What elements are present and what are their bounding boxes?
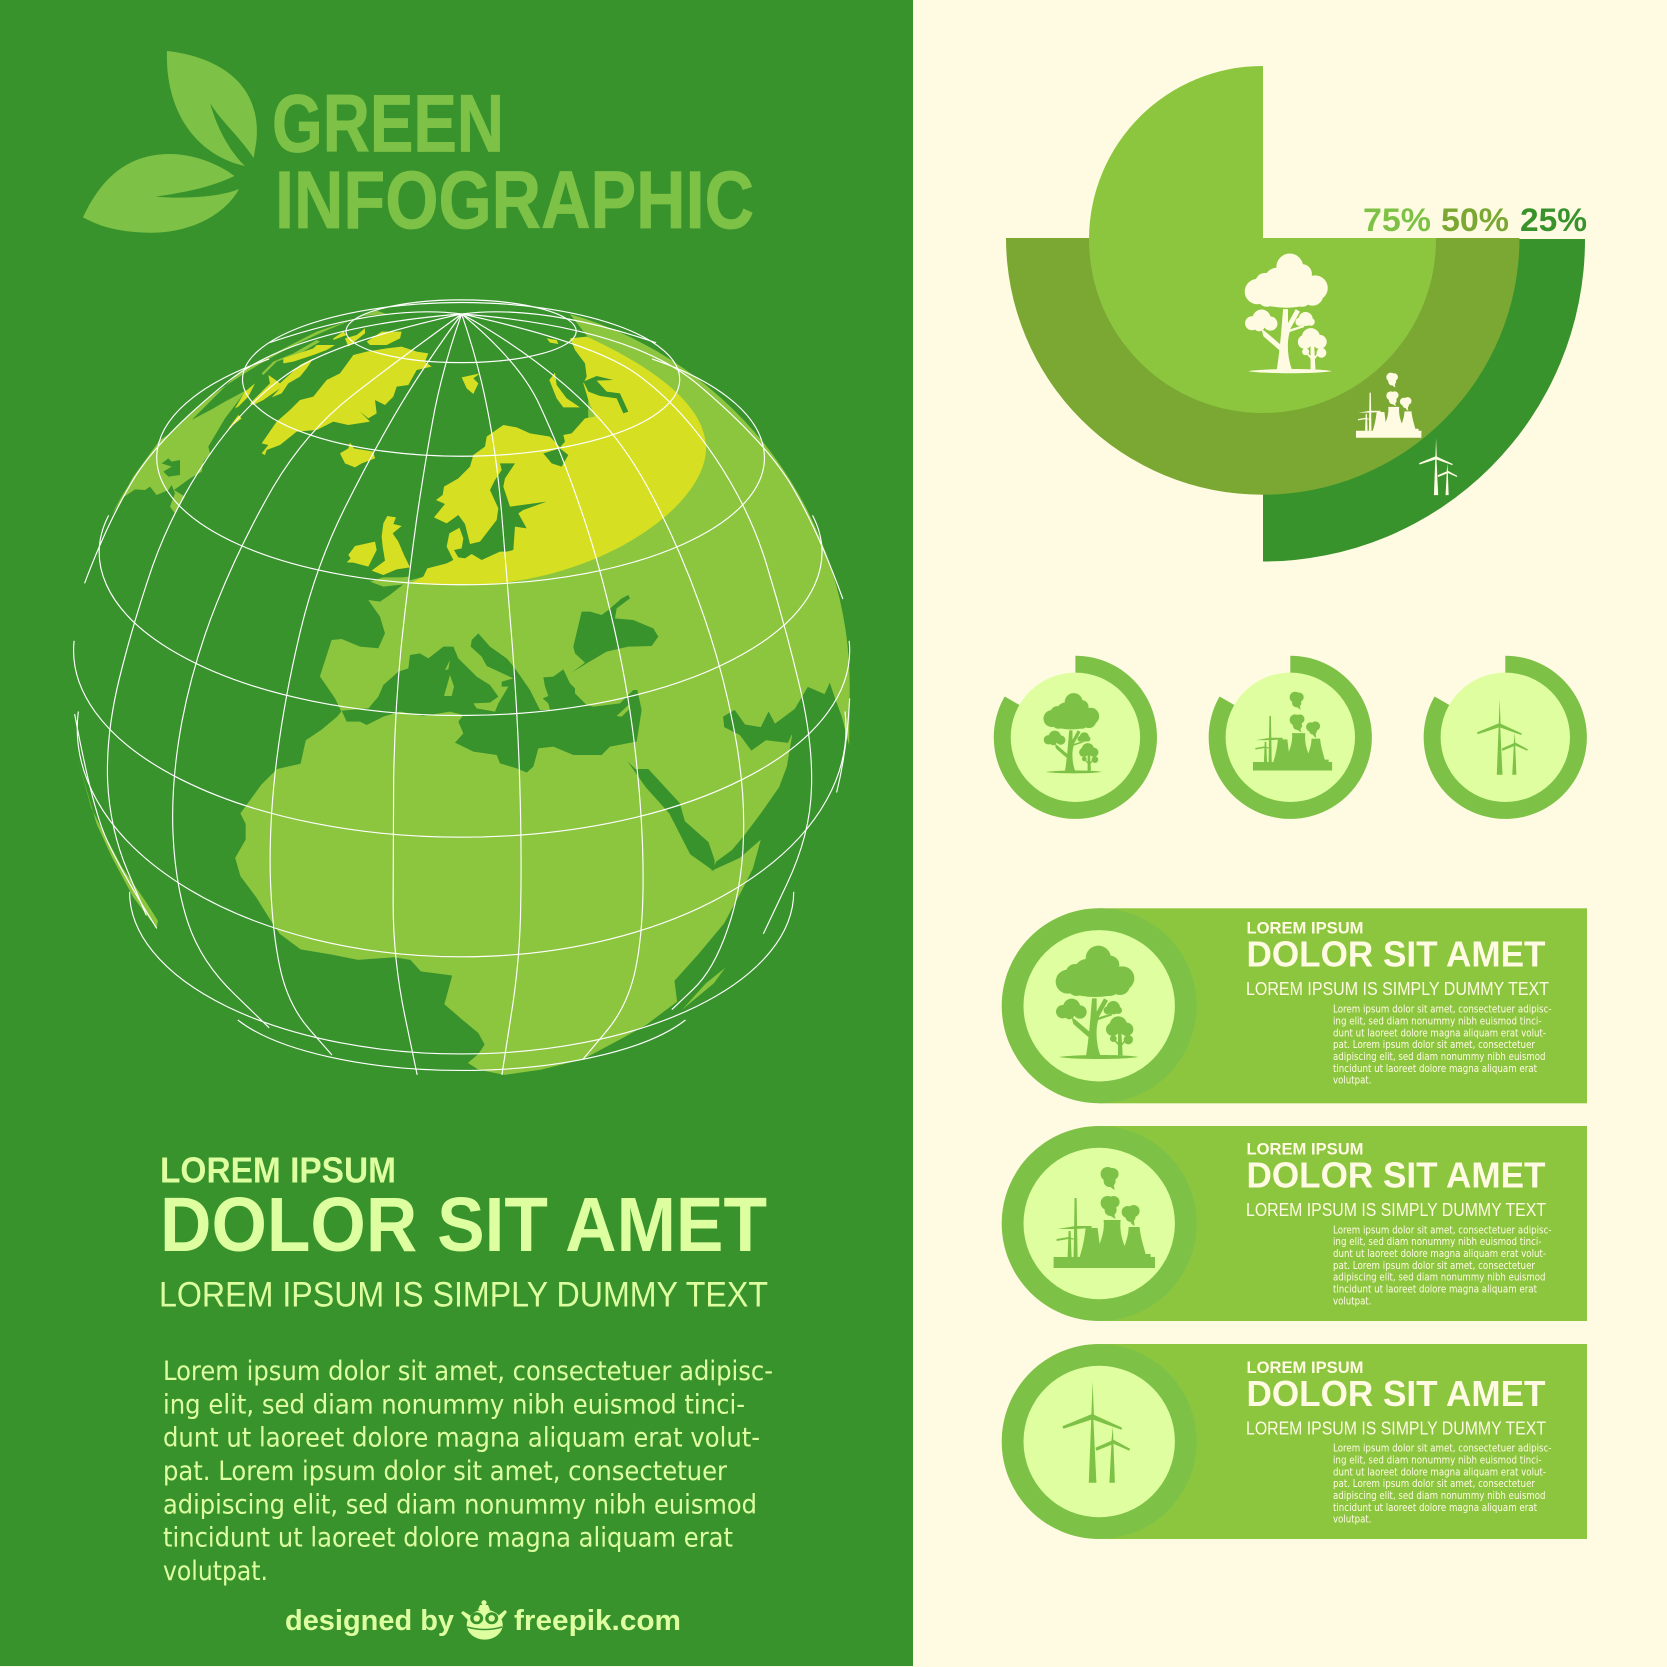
sea: Red Sea [627, 761, 715, 871]
banner: factory: DOLOR SIT AMET [1246, 1155, 1546, 1196]
title: INFOGRAPHIC [275, 155, 754, 246]
chart labels: 25% [1520, 202, 1587, 238]
icon: factory [1356, 373, 1421, 438]
banner: tree: LOREM IPSUM [1246, 918, 1364, 937]
land: Europe, Africa and Asia [235, 314, 850, 1075]
banner: wind: Lorem ipsum dolor sit amet, consectetuer adipisc- [1333, 1443, 1552, 1455]
banner: tree: adipiscing elit, sed diam nonummy nibh euismod [1333, 1051, 1546, 1063]
sea: White Sea [543, 448, 568, 467]
chart: concentric percent sectors [1006, 66, 1585, 562]
heading: left panel [159, 1150, 768, 1315]
sector: 50% [1006, 238, 1520, 495]
banner: factory: tincidunt ut laoreet dolore magna aliquam erat [1333, 1284, 1537, 1296]
North America and Arctic [112, 311, 432, 515]
sea: Baltic [454, 463, 547, 560]
globe [78, 314, 850, 1075]
land: Canada [113, 390, 247, 514]
banner: tree: pat. Lorem ipsum dolor sit amet, consectetuer [1333, 1039, 1536, 1051]
credit: designed by freepik [285, 1600, 681, 1640]
credit: designed by freepik: designed by [285, 1605, 454, 1637]
banner: factory: Lorem ipsum dolor sit amet, consectetuer adipisc- [1333, 1224, 1552, 1236]
chart labels: 50% [1441, 202, 1509, 238]
sea: Ob inlet [583, 376, 628, 413]
text block: left paragraph [163, 1356, 773, 1587]
northern yellow region [340, 337, 706, 587]
sea: Persian Gulf [723, 710, 792, 751]
icon: wind turbines [1419, 438, 1457, 495]
land: limb sliver [112, 311, 387, 515]
banner: tree [1002, 908, 1587, 1103]
banner: factory: pat. Lorem ipsum dolor sit amet, consectetuer [1333, 1260, 1536, 1272]
text block: left paragraph: pat. Lorem ipsum dolor sit amet, consectetuer [163, 1456, 728, 1487]
banner: factory [1002, 1126, 1587, 1321]
icon: freepik robot [461, 1600, 507, 1640]
land: Great Britain [372, 516, 410, 575]
chart labels [1363, 202, 1587, 238]
badge: wind [1424, 656, 1587, 819]
land: Arctic islands [227, 328, 402, 430]
banner: wind: dunt ut laoreet dolore magna aliquam erat volut- [1333, 1466, 1546, 1478]
Mediterranean and Black Sea [342, 595, 658, 773]
land: Svalbard [462, 373, 480, 394]
banner: factory: ing elit, sed diam nonummy nibh euismod tinci- [1333, 1236, 1542, 1248]
chart labels: 75% [1363, 202, 1431, 238]
banner: factory: LOREM IPSUM [1246, 1140, 1364, 1159]
banner: wind: LOREM IPSUM [1246, 1358, 1364, 1377]
text block: left paragraph: tincidunt ut laoreet dolore magna aliquam erat [163, 1523, 733, 1554]
text block: left paragraph: dunt ut laoreet dolore magna aliquam erat volut- [163, 1423, 760, 1454]
banner: tree: tincidunt ut laoreet dolore magna aliquam erat [1333, 1063, 1537, 1075]
land: Mediterranean islands [444, 660, 630, 717]
sea: Mediterranean [342, 633, 642, 773]
banner: tree: Lorem ipsum dolor sit amet, consectetuer adipisc- [1333, 1004, 1552, 1016]
land: Ireland [347, 542, 377, 567]
sea: Black Sea [572, 595, 658, 673]
land: Madagascar [682, 968, 725, 1010]
text block: left paragraph: ing elit, sed diam nonummy nibh euismod tinci- [163, 1389, 745, 1420]
banner: wind: LOREM IPSUM IS SIMPLY DUMMY TEXT [1246, 1418, 1546, 1438]
banner: wind [1002, 1344, 1587, 1539]
title: GREEN [272, 79, 504, 170]
banner: wind: adipiscing elit, sed diam nonummy nibh euismod [1333, 1490, 1546, 1502]
heading: left panel: LOREM IPSUM IS SIMPLY DUMMY TEXT [159, 1275, 768, 1315]
banner: factory: dunt ut laoreet dolore magna aliquam erat volut- [1333, 1248, 1546, 1260]
land: Scandinavia and Russia [412, 337, 706, 585]
banner: tree: dunt ut laoreet dolore magna aliquam erat volut- [1333, 1027, 1546, 1039]
banner: tree: ing elit, sed diam nonummy nibh euismod tinci- [1333, 1016, 1542, 1028]
sector: 75% [1089, 66, 1436, 413]
badge: tree [994, 656, 1157, 819]
banner: tree: LOREM IPSUM IS SIMPLY DUMMY TEXT [1246, 979, 1549, 999]
sea: Hudson inlet [162, 458, 180, 477]
panel: left green [0, 0, 913, 1666]
icon: tree [1245, 254, 1332, 373]
heading: left panel: DOLOR SIT AMET [160, 1182, 767, 1268]
banner: factory: volutpat. [1333, 1295, 1372, 1307]
globe grid lines [74, 300, 850, 1075]
text block: left paragraph: volutpat. [163, 1556, 268, 1587]
banner: factory: LOREM IPSUM IS SIMPLY DUMMY TEXT [1246, 1200, 1546, 1220]
logo: leaves [83, 51, 257, 233]
banner: tree: volutpat. [1333, 1075, 1372, 1087]
banner: tree: DOLOR SIT AMET [1246, 934, 1546, 975]
sector: 25% [1263, 239, 1585, 562]
title [272, 79, 754, 246]
text block: left paragraph: Lorem ipsum dolor sit amet, consectetuer adipisc- [163, 1356, 773, 1387]
banner: wind: DOLOR SIT AMET [1246, 1373, 1546, 1414]
banner: factory: adipiscing elit, sed diam nonummy nibh euismod [1333, 1272, 1546, 1284]
banner: wind: ing elit, sed diam nonummy nibh euismod tinci- [1333, 1454, 1542, 1466]
land: Iceland [340, 443, 375, 467]
land: South America limb [78, 761, 158, 928]
text block: left paragraph: adipiscing elit, sed diam nonummy nibh euismod [163, 1489, 757, 1520]
banner: wind: pat. Lorem ipsum dolor sit amet, consectetuer [1333, 1478, 1536, 1490]
badge: factory [1209, 656, 1372, 819]
banner: wind: tincidunt ut laoreet dolore magna aliquam erat [1333, 1502, 1537, 1514]
credit: designed by freepik: freepik.com [514, 1605, 681, 1637]
heading: left panel: LOREM IPSUM [160, 1150, 396, 1191]
land: Greenland [262, 347, 432, 455]
land: north France strip [370, 577, 410, 587]
land: Novaya Zemlya [547, 338, 580, 407]
land: light Arctic island [262, 340, 320, 375]
banner: wind: volutpat. [1333, 1514, 1372, 1526]
